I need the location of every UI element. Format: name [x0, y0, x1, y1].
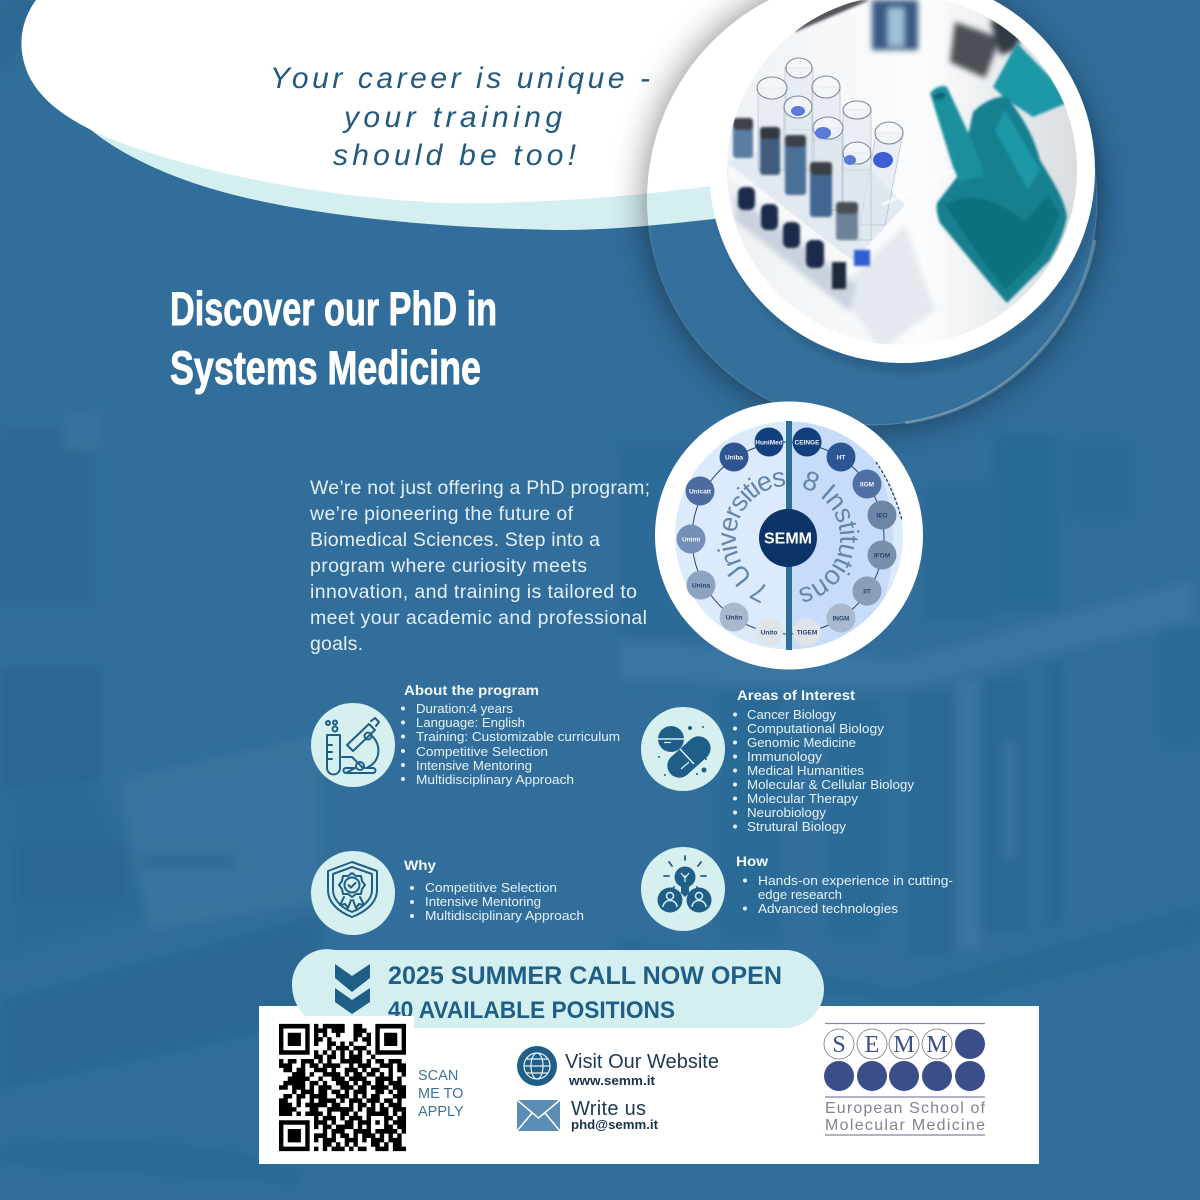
intro paragraph: program where curiosity meets	[310, 555, 587, 577]
intro paragraph	[309, 477, 650, 655]
university nodes: Uniba	[725, 454, 743, 462]
website contact	[565, 1051, 719, 1088]
list: methods: Advanced technologies	[758, 901, 899, 916]
list: programme facts: Language: English	[416, 715, 525, 730]
intro paragraph: we’re pioneering the future of	[309, 503, 574, 525]
list: research areas: Strutural Biology	[747, 819, 847, 834]
SEMM logo: Molecular Medicine	[825, 1117, 985, 1134]
section: areas of interest	[641, 687, 915, 834]
university nodes: Unina	[692, 582, 710, 590]
scan me to apply	[418, 1068, 464, 1120]
SEMM logo: European School of	[825, 1100, 986, 1117]
SEMM logo: S	[832, 1032, 846, 1058]
list: methods: edge research	[758, 887, 842, 902]
list: reasons: Intensive Mentoring	[425, 894, 541, 909]
scan me to apply: APPLY	[418, 1104, 464, 1120]
glove	[930, 43, 1067, 303]
list: programme facts: Competitive Selection	[416, 744, 548, 759]
centre node SEMM	[759, 509, 817, 567]
university nodes: Unicatt	[689, 488, 712, 496]
email contact: Write us	[571, 1098, 646, 1120]
tagline	[270, 62, 650, 172]
list: programme facts: Training: Customizable curriculum	[416, 729, 620, 744]
institution nodes: CEINGE	[795, 440, 820, 446]
intro paragraph: Biomedical Sciences. Step into a	[310, 529, 600, 551]
list: reasons	[410, 880, 584, 923]
scan me to apply: ME TO	[418, 1086, 463, 1102]
institution nodes	[792, 428, 896, 646]
icon: shield with ribbon badge	[311, 851, 395, 935]
university nodes: Unito	[761, 630, 777, 636]
network diagram: 7 universities and 8 institutions	[655, 402, 923, 670]
tagline: should be too!	[333, 139, 577, 172]
section: about the program	[311, 682, 620, 787]
list: methods: Hands-on experience in cutting-	[758, 873, 953, 888]
list: research areas	[733, 707, 915, 834]
icon: lightbulb and two people	[641, 847, 725, 931]
university nodes: Unitn	[726, 614, 742, 622]
SEMM logo: E	[865, 1032, 879, 1058]
university nodes: Unimi	[682, 536, 700, 544]
email contact	[571, 1098, 659, 1132]
heading: areas of interest: Areas of Interest	[737, 687, 855, 703]
SEMM logo: M	[926, 1032, 948, 1058]
list: programme facts: Multidisciplinary Approach	[416, 772, 574, 787]
website contact: Visit Our Website	[565, 1051, 719, 1073]
list: methods	[743, 873, 953, 916]
institution nodes: IIT	[863, 588, 871, 596]
dark sample tubes	[733, 118, 858, 240]
institution nodes: IIGM	[860, 482, 874, 488]
institution nodes: IEO	[876, 512, 888, 520]
heading: about the program: About the program	[404, 682, 539, 698]
intro paragraph: meet your academic and professional	[310, 607, 647, 629]
list: reasons: Multidisciplinary Approach	[425, 908, 584, 923]
rack	[735, 195, 856, 312]
institution nodes: HT	[837, 454, 845, 462]
tagline: your training	[342, 101, 562, 134]
icon: globe	[517, 1046, 557, 1086]
header swoosh shape	[21, 0, 830, 230]
list: programme facts	[401, 701, 620, 787]
intro paragraph: goals.	[310, 633, 363, 655]
list: research areas: Molecular Therapy	[747, 791, 859, 806]
QR block	[259, 1016, 414, 1164]
website contact: www.semm.it	[568, 1074, 656, 1088]
call banner	[292, 949, 824, 1028]
institution nodes: TIGEM	[797, 630, 817, 636]
icon: envelope	[517, 1100, 560, 1131]
contact panel background	[259, 1006, 1039, 1164]
email contact: phd@semm.it	[571, 1118, 659, 1132]
institution nodes: INGM	[833, 616, 849, 622]
list: research areas: Immunology	[747, 749, 823, 764]
main heading: Systems Medicine	[170, 341, 481, 394]
call banner: 2025 SUMMER CALL NOW OPEN	[388, 962, 782, 990]
list: research areas: Genomic Medicine	[747, 735, 856, 750]
university nodes	[676, 428, 784, 646]
section: why	[311, 851, 584, 935]
SEMM logo	[824, 1024, 986, 1135]
glass tubes	[758, 68, 903, 240]
list: research areas: Cancer Biology	[747, 707, 837, 722]
heading: why: Why	[404, 857, 436, 873]
icon: microscope and test tube	[311, 703, 395, 787]
centre node SEMM: SEMM	[764, 530, 812, 548]
list: programme facts: Intensive Mentoring	[416, 758, 532, 773]
list: research areas: Medical Humanities	[747, 763, 865, 778]
intro paragraph: We’re not just offering a PhD program;	[310, 477, 650, 499]
heading: how: How	[736, 853, 768, 869]
label: 8 Institutions: 8 Institutions	[800, 472, 860, 602]
main heading	[170, 282, 497, 394]
section: how	[641, 847, 953, 931]
SEMM logo: M	[893, 1032, 915, 1058]
photo circle with lab tubes and gloved hand	[647, 0, 1100, 425]
list: research areas: Molecular & Cellular Biology	[747, 777, 915, 792]
scan me to apply: SCAN	[418, 1068, 458, 1084]
main heading: Discover our PhD in	[170, 282, 497, 335]
tagline: Your career is unique -	[270, 62, 650, 95]
call banner: 40 AVAILABLE POSITIONS	[388, 997, 675, 1024]
list: research areas: Computational Biology	[747, 721, 885, 736]
icon: pills	[641, 707, 725, 791]
university nodes: HuniMed	[755, 440, 783, 446]
intro paragraph: innovation, and training is tailored to	[310, 581, 637, 603]
label: 7 Universities: 7 Universities	[717, 472, 786, 604]
institution nodes: IFOM	[874, 552, 890, 560]
list: reasons: Competitive Selection	[425, 880, 557, 895]
list: research areas: Neurobiology	[747, 805, 827, 820]
list: programme facts: Duration:4 years	[416, 701, 513, 716]
